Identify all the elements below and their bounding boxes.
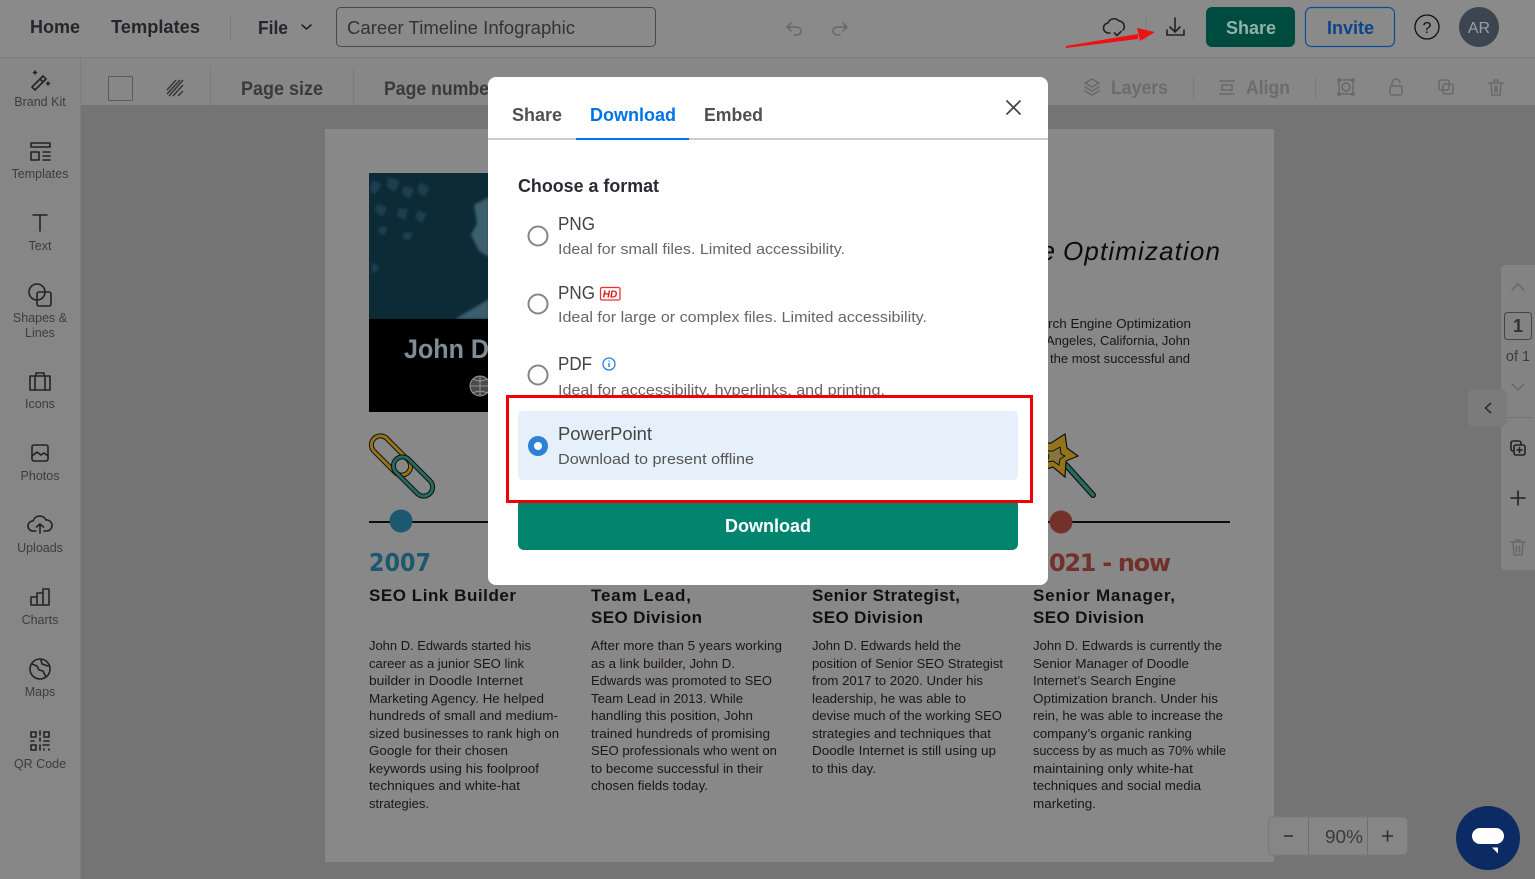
item: Templates: Templates (12, 167, 68, 181)
item: Brand Kit: Brand Kit (14, 95, 66, 109)
column 2: Team Lead (591, 586, 782, 793)
label: layers: Layers (1111, 78, 1168, 99)
column 1: SEO Link Builder: keywords using his foolproof (369, 761, 539, 776)
column 2: Team Lead: handling this position, John (591, 708, 753, 723)
column 4: Senior Manager (1033, 586, 1226, 811)
heading: Search Engine Optimization: e (1040, 236, 1055, 266)
item: Uploads: Uploads (17, 541, 63, 555)
icon: hatch pattern (167, 80, 183, 96)
name plate: John D (404, 334, 489, 364)
item: Maps: Maps (25, 685, 55, 699)
option: PDF: PDF (558, 354, 592, 374)
column 4: Senior Manager: Internet’s Search Engine (1033, 673, 1176, 688)
column 1: SEO Link Builder: techniques and white-hat (369, 778, 520, 793)
column 3: Senior Strategist: devise much of the working SEO (812, 708, 1002, 723)
column 4: Senior Manager: SEO Division (1033, 608, 1144, 627)
column 2: Team Lead: After more than 5 years working (591, 638, 782, 653)
column 1: SEO Link Builder: John D. Edwards started his (369, 638, 531, 653)
icon: cloud saved (1103, 19, 1124, 36)
right page panel (1501, 265, 1535, 570)
column 4: Senior Manager: maintaining only white-hat (1033, 761, 1193, 776)
option: PNG: Ideal for small files. Limited accessibility. (558, 241, 845, 258)
item: Charts: Charts (22, 613, 58, 627)
name plate (369, 319, 490, 412)
column 2: Team Lead: Team Lead, (591, 586, 691, 605)
icon: download (1167, 18, 1184, 35)
column 3: Senior Strategist: to this day. (812, 761, 876, 776)
intro text (1046, 316, 1191, 366)
year: 2021 - now: 021 - now (1049, 549, 1171, 577)
arrow pointing to download icon (1066, 28, 1155, 48)
item: Shapes and Lines: Lines (25, 326, 55, 340)
column 4: Senior Manager: Senior Manager of Doodle (1033, 656, 1189, 671)
item: QR Code: QR Code (14, 757, 66, 771)
item: Brand Kit (14, 71, 66, 109)
top navigation bar (0, 0, 1535, 58)
left sidebar (0, 57, 80, 879)
button: Share: Share (1226, 18, 1276, 38)
column 2: Team Lead: Team Lead in 2013. While (591, 691, 743, 706)
button: Invite (1306, 8, 1394, 46)
option: PNG HD (528, 283, 927, 326)
option: PDF (528, 354, 885, 399)
avatar: AR (1468, 20, 1490, 37)
option: PNG HD: Ideal for large or complex files. Limited accessibility. (558, 309, 927, 326)
button: Download: Download (725, 516, 811, 536)
column 2: Team Lead: trained hundreds of promising (591, 726, 770, 741)
icon: undo (787, 23, 801, 35)
secondary toolbar (81, 57, 1535, 105)
timeline marker 2007 (390, 510, 412, 532)
nav: Templates: Templates (111, 17, 200, 37)
item: Icons: Icons (25, 397, 55, 411)
column 2: Team Lead: as a link builder, John D. (591, 656, 735, 671)
avatar (1459, 7, 1499, 47)
column 3: Senior Strategist: position of Senior SEO Strategist (812, 656, 1003, 671)
document page (325, 129, 1274, 862)
item: Photos (21, 445, 59, 483)
icon: page down (1512, 384, 1524, 390)
icon: align (1220, 81, 1234, 94)
item: Photos: Photos (21, 469, 59, 483)
column 2: Team Lead: to become successful in their (591, 761, 764, 776)
nav: File menu: File (258, 18, 288, 38)
column 1: SEO Link Builder: career as a junior SEO link (369, 656, 524, 671)
icon: help (1415, 15, 1439, 39)
red highlight box (508, 396, 1032, 502)
icon: add page (1511, 491, 1525, 505)
option: PNG HD: PNG (558, 283, 595, 303)
column 3: Senior Strategist: from 2017 to 2020. Under his (812, 673, 983, 688)
icon: help: ? (1423, 20, 1432, 37)
column 4: Senior Manager: success by as much as 70% while (1033, 743, 1226, 758)
item: Templates (12, 143, 68, 181)
column 4: Senior Manager: marketing. (1033, 796, 1096, 811)
column 2: Team Lead: chosen fields today. (591, 778, 708, 793)
intro text: Angeles, California, John (1046, 333, 1190, 348)
option: PowerPoint selected (518, 411, 1018, 480)
timeline marker 2021 (1050, 510, 1072, 534)
column 3: Senior Strategist: Senior Strategist, (812, 586, 960, 605)
button: Download (518, 502, 1018, 550)
option: PNG: PNG (558, 214, 595, 234)
column 1: SEO Link Builder: Google for their chosen (369, 743, 508, 758)
nav: File menu (258, 18, 311, 38)
column 1: SEO Link Builder: hundreds of small and medium- (369, 708, 558, 723)
item: Icons (25, 373, 55, 411)
button: Invite: Invite (1327, 18, 1374, 38)
icon: delete page (1511, 540, 1525, 555)
column 3: Senior Strategist: strategies and techniques that (812, 726, 991, 741)
icon: close (1006, 100, 1020, 114)
column 3: Senior Strategist: leadership, he was able to (812, 691, 966, 706)
column 3: Senior Strategist: Doodle Internet is still using up (812, 743, 996, 758)
icon: duplicate (1439, 80, 1453, 94)
column 4: Senior Manager: techniques and social media (1033, 778, 1202, 793)
zoom control: 90% (1325, 827, 1363, 847)
document title input (336, 8, 656, 46)
icon: lock (1390, 79, 1402, 95)
item: Charts (22, 589, 58, 627)
label: page number: Page numbe (384, 79, 489, 100)
timeline line (369, 521, 1230, 523)
modal dialog (488, 77, 1048, 585)
icon: redo (833, 23, 847, 35)
heading: choose a format: Choose a format (518, 176, 659, 196)
icon: magic wand (1035, 434, 1093, 495)
item: Uploads (17, 516, 63, 555)
item: Shapes and Lines (13, 284, 68, 340)
icon: page up (1512, 284, 1524, 290)
icon: delete (1489, 80, 1503, 95)
column 4: Senior Manager: rein, he was able to increase the (1033, 708, 1223, 723)
item: Maps (25, 659, 55, 699)
column 1: SEO Link Builder: SEO Link Builder (369, 586, 516, 605)
tab: Embed: Embed (704, 105, 763, 125)
collapse tab (1468, 389, 1507, 427)
option: PowerPoint selected: Download to present offline (558, 451, 754, 468)
page number box: 1 (1513, 316, 1523, 336)
option: PowerPoint selected: PowerPoint (558, 424, 652, 444)
icon: layers (1085, 79, 1099, 95)
item: Text (29, 215, 52, 253)
profile photo banner (369, 173, 489, 319)
heading: Search Engine Optimization: Optimization (1063, 236, 1220, 266)
page number box (1504, 312, 1532, 340)
column 3: Senior Strategist (812, 586, 1003, 776)
column 2: Team Lead: SEO professionals who went on (591, 743, 777, 758)
column 1: SEO Link Builder (369, 586, 559, 811)
column 1: SEO Link Builder: Marketing Agency. He helped (369, 691, 544, 706)
chat button (1456, 806, 1520, 870)
label: page size: Page size (241, 79, 323, 100)
icon: group (1338, 79, 1354, 95)
tab: Download active: Download (590, 105, 676, 125)
option: PNG HD: HD (603, 290, 617, 300)
column 1: SEO Link Builder: strategies. (369, 796, 429, 811)
icon: chain link (368, 432, 436, 500)
column 1: SEO Link Builder: sized businesses to rank high on (369, 726, 559, 741)
year: 2007: 2007 (369, 548, 431, 577)
page count: of 1 (1506, 349, 1530, 365)
item: Shapes and Lines: Shapes & (13, 311, 68, 325)
tab: Share: Share (512, 105, 562, 125)
column 3: Senior Strategist: SEO Division (812, 608, 923, 627)
nav: Home: Home (30, 17, 80, 37)
option: PNG (528, 214, 845, 258)
column 4: Senior Manager: Senior Manager, (1033, 586, 1175, 605)
icon: duplicate page (1511, 441, 1525, 455)
column 4: Senior Manager: John D. Edwards is currently the (1033, 638, 1222, 653)
column 4: Senior Manager: Optimization branch. Under his (1033, 691, 1219, 706)
intro text: rch Engine Optimization (1048, 316, 1191, 331)
intro text: the most successful and (1050, 351, 1190, 366)
column 4: Senior Manager: company’s organic ranking (1033, 726, 1192, 741)
icon: colour swatch (108, 76, 132, 100)
label: align: Align (1246, 78, 1290, 99)
zoom control (1268, 817, 1408, 855)
document title input: Career Timeline Infographic (347, 18, 575, 38)
column 1: SEO Link Builder: builder in Doodle Internet (369, 673, 523, 688)
item: Text: Text (29, 239, 52, 253)
column 2: Team Lead: Edwards was promoted to SEO (591, 673, 772, 688)
column 3: Senior Strategist: John D. Edwards held the (812, 638, 961, 653)
column 2: Team Lead: SEO Division (591, 608, 702, 627)
button: Share (1206, 7, 1295, 47)
option: PDF: Ideal for accessibility, hyperlinks, and printing. (558, 382, 885, 399)
item: QR Code (14, 731, 66, 771)
